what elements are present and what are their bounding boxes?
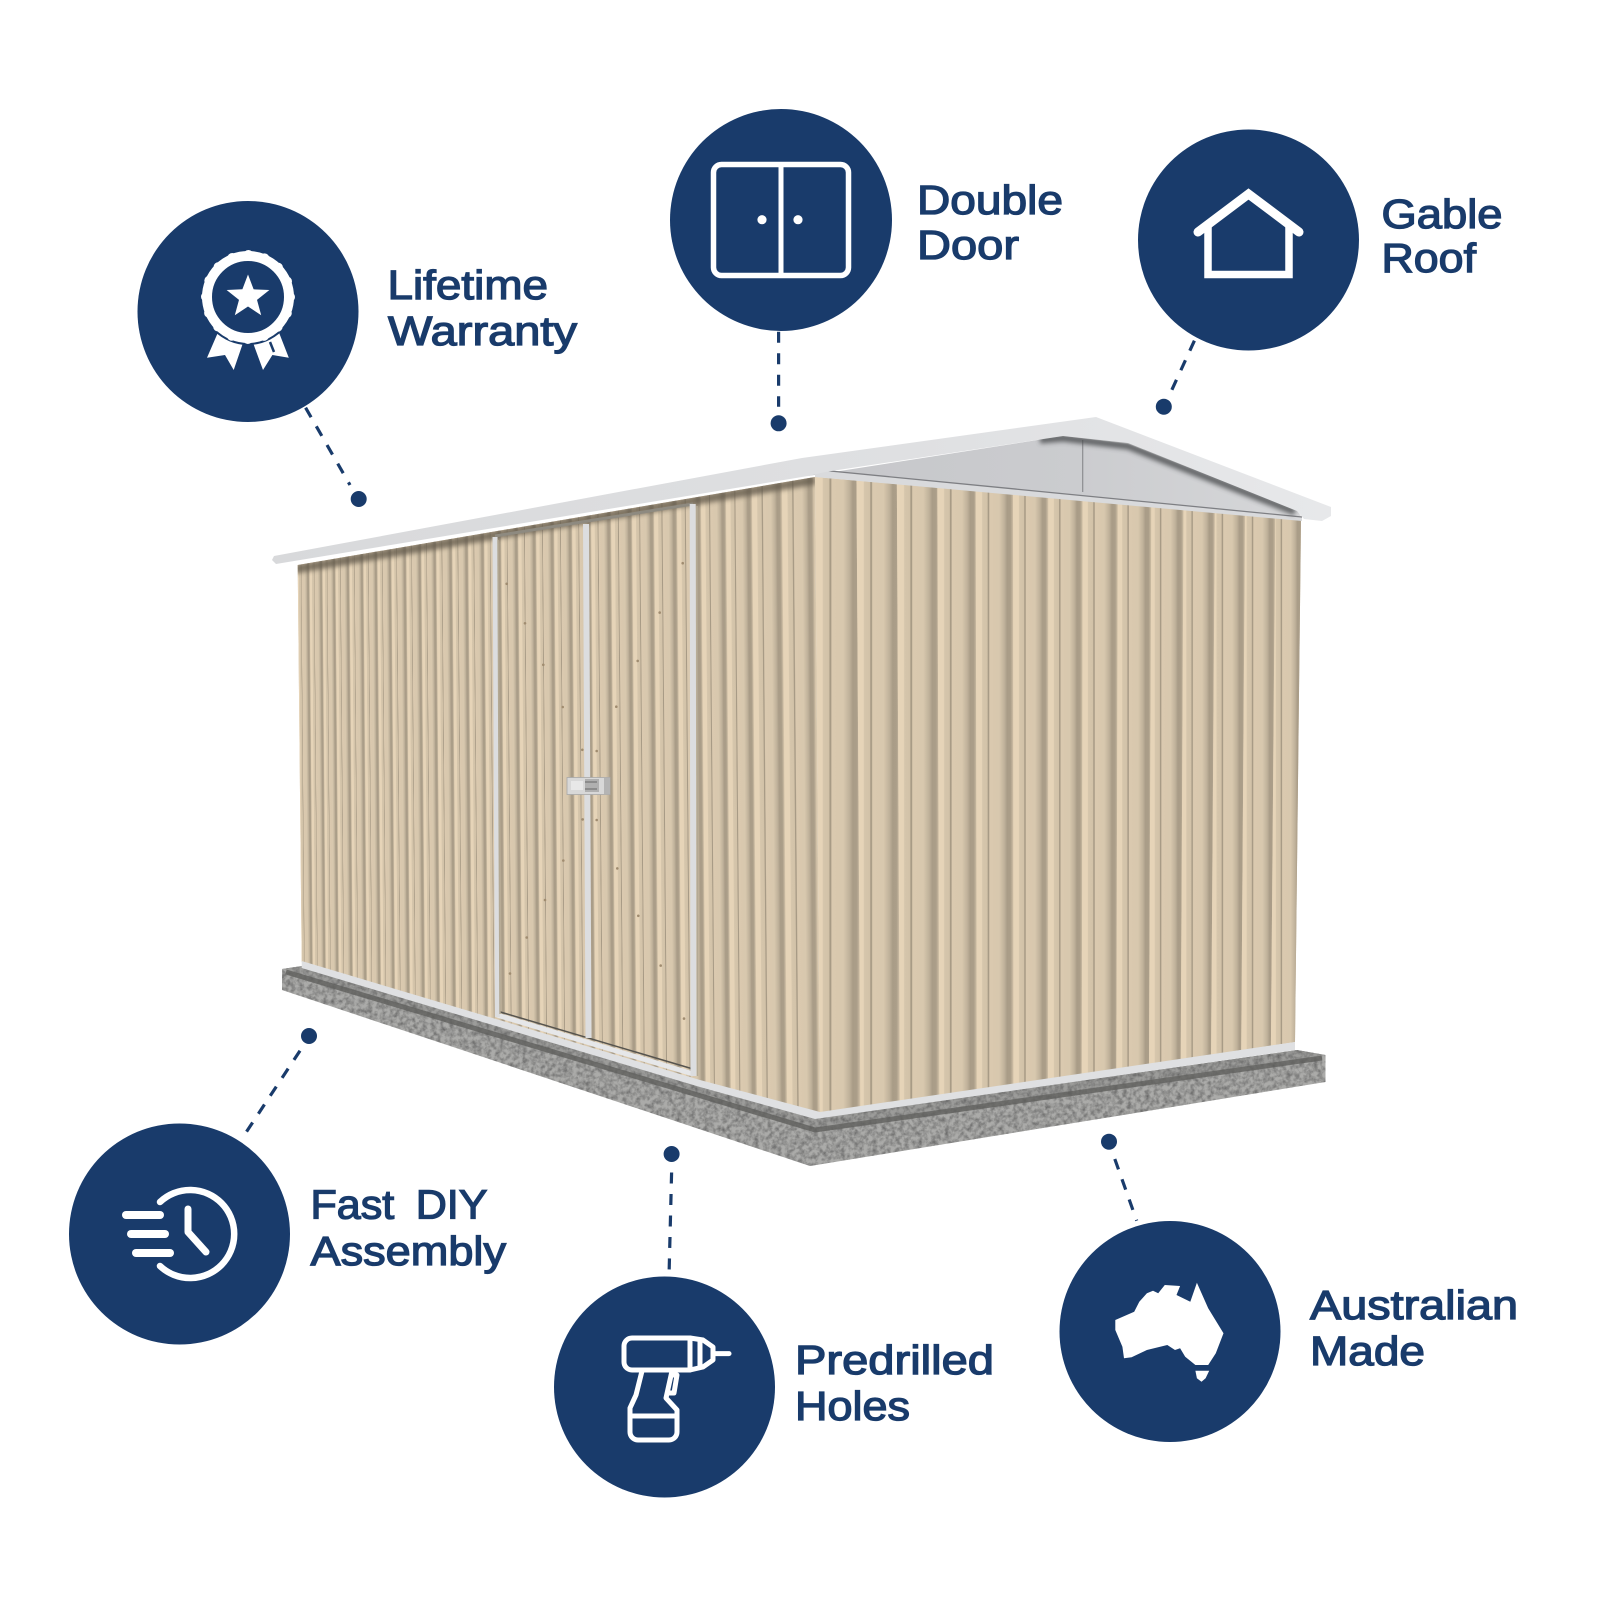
label: Holes — [795, 1383, 910, 1429]
leader line — [245, 1028, 317, 1134]
callout: Fast DIY Assembly — [69, 1028, 507, 1344]
product image: garden shed — [270, 417, 1340, 1180]
label: Assembly — [310, 1228, 507, 1274]
callout: Australian Made — [1060, 1134, 1518, 1442]
label — [1382, 191, 1502, 281]
roof — [272, 417, 1331, 564]
label: Gable — [1382, 191, 1502, 237]
callout: Double Door — [670, 109, 1063, 431]
leader line — [771, 332, 787, 431]
icon: fast clock — [126, 1190, 234, 1278]
label: Predrilled — [795, 1337, 994, 1383]
right end wall — [810, 470, 1310, 1120]
label — [1310, 1282, 1518, 1374]
label: Fast DIY — [310, 1182, 488, 1228]
leader line — [1156, 341, 1194, 415]
label — [310, 1182, 507, 1274]
badge circle — [138, 201, 358, 422]
label — [388, 262, 578, 354]
icon: award rosette — [200, 249, 296, 370]
leader line — [306, 408, 367, 507]
double door frame — [495, 504, 698, 1076]
badge circle — [1060, 1221, 1280, 1442]
icon: gable house — [1198, 194, 1299, 274]
door screws — [505, 562, 685, 1020]
label: Lifetime — [388, 262, 548, 308]
label: Roof — [1382, 235, 1477, 281]
icon: double door — [714, 163, 848, 277]
label — [795, 1337, 994, 1429]
leader line — [1101, 1134, 1137, 1221]
badge circle — [554, 1276, 775, 1498]
left side wall with door — [290, 470, 825, 1130]
badge circle — [670, 109, 892, 331]
callout: Lifetime Warranty — [138, 201, 578, 507]
gable end panel — [808, 436, 1302, 521]
label: Australian — [1310, 1282, 1518, 1328]
badge circle — [1138, 130, 1359, 350]
base flashing — [302, 961, 1295, 1119]
icon: cordless drill — [624, 1338, 729, 1440]
leader line — [664, 1146, 680, 1277]
badge circle — [69, 1124, 290, 1344]
label: Made — [1310, 1328, 1425, 1374]
label: Door — [917, 222, 1019, 268]
label — [917, 177, 1063, 268]
door latch — [567, 778, 610, 794]
label: Double — [917, 177, 1063, 223]
callout: Predrilled Holes — [554, 1146, 994, 1498]
callout: Gable Roof — [1138, 130, 1502, 415]
icon: Australia map — [1115, 1283, 1224, 1382]
label: Warranty — [388, 308, 578, 354]
concrete slab — [282, 966, 1326, 1166]
